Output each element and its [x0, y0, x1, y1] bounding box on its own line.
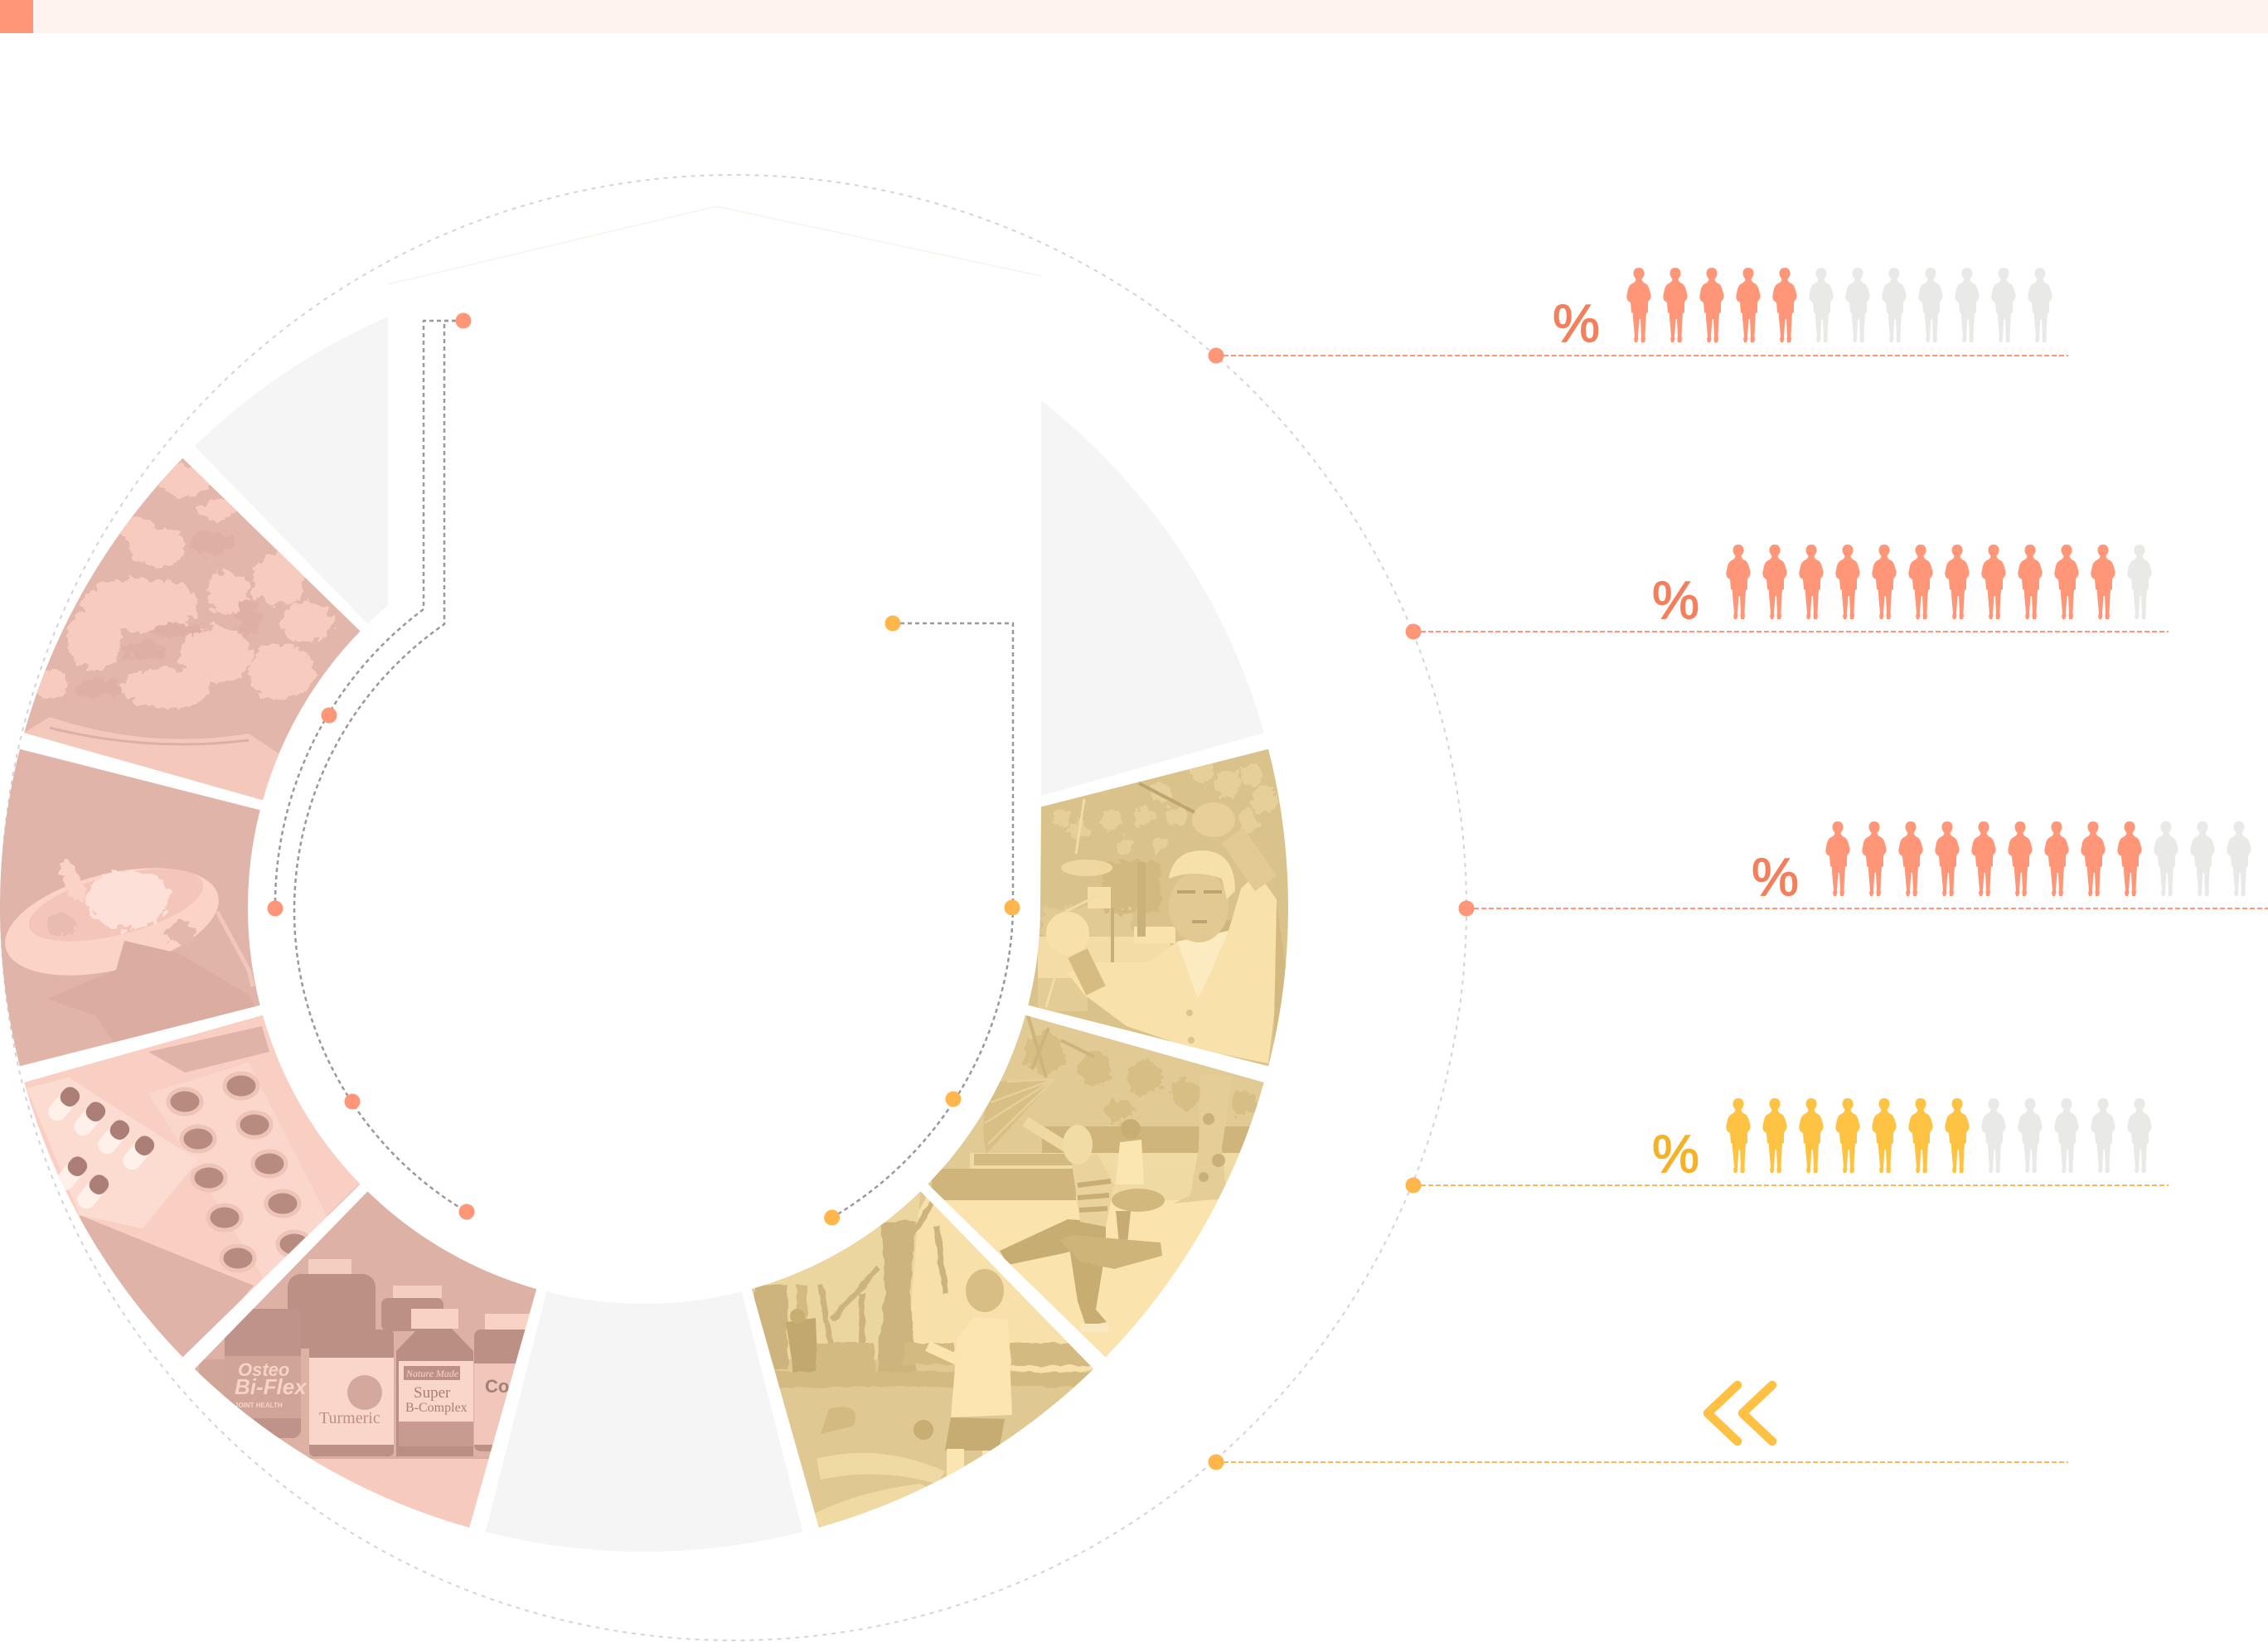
- left blister sheet: [27, 1078, 198, 1228]
- photo: bowl of rice: [12, 448, 369, 804]
- icon: double left chevron: [1708, 1385, 1772, 1441]
- percent sign 2: %: [1652, 570, 1699, 630]
- Osteo Bi-Flex bottle: Bi-Flex: [235, 1374, 308, 1399]
- plate edge: [24, 717, 286, 800]
- Nature Made bottle: [396, 1309, 473, 1456]
- raised arm: [1248, 873, 1265, 891]
- back bottle right: [381, 1298, 443, 1331]
- Nature Made bottle: Nature Made: [405, 1368, 459, 1379]
- CoQ bottle: CoQ: [485, 1376, 523, 1397]
- Turmeric bottle: [309, 1330, 394, 1456]
- hand: [47, 941, 259, 1046]
- leader dot 1: [1209, 348, 1224, 363]
- yellow connector line: [832, 623, 1013, 1218]
- bright background: [907, 1194, 1102, 1376]
- Osteo Bi-Flex bottle: JOINT HEALTH: [235, 1402, 283, 1409]
- inner yellow dots: [824, 615, 1020, 1225]
- dark surfaces: [80, 1215, 254, 1368]
- dashed outer ring: [1, 175, 1466, 1640]
- dancer's lower fan: [1100, 1238, 1162, 1269]
- left arm and fist: [1078, 953, 1096, 991]
- header bar: [0, 0, 2268, 33]
- panel: empty segment top left: [195, 317, 388, 624]
- shelf: [182, 1457, 547, 1532]
- people pictogram 2: 11 of 12: [1726, 545, 2152, 619]
- diabolo: [1061, 860, 1112, 876]
- Turmeric bottle: Turmeric: [319, 1409, 380, 1427]
- people pictogram 3: 9 of 12: [1825, 821, 2251, 896]
- plane tree trunk: [1174, 1088, 1225, 1204]
- CoQ bottle: [474, 1314, 532, 1451]
- leader dot 4: [1406, 1177, 1421, 1194]
- man's hair: [1169, 850, 1235, 899]
- percent sign 4: %: [1652, 1124, 1699, 1184]
- panel: empty segment bottom: [486, 1291, 802, 1552]
- leader dot 2: [1406, 623, 1421, 640]
- percent sign 1: %: [1553, 293, 1600, 353]
- photo: supplement bottles: [182, 1185, 547, 1533]
- leader line 2: [1413, 631, 2169, 632]
- leader line 4: [1413, 1184, 2169, 1186]
- stat row 5: [1209, 1385, 2068, 1470]
- trees: [754, 1202, 945, 1380]
- right blister sheet: [148, 1063, 331, 1280]
- Nature Made bottle: B-Complex: [405, 1401, 468, 1415]
- header accent block: [0, 0, 33, 33]
- path light ripples: [817, 1453, 945, 1484]
- salmon connector lines: [275, 321, 467, 1212]
- stat row 3: [1459, 821, 2268, 917]
- inner salmon dots: [267, 313, 474, 1220]
- man in background: [786, 1318, 817, 1373]
- photo: fan dancers in park: [928, 1015, 1264, 1358]
- ground: [945, 1200, 1218, 1358]
- man's face: [1174, 920, 1227, 942]
- back bottle: [288, 1274, 376, 1349]
- leader line 5: [1216, 1461, 2068, 1463]
- stat row 4: [1406, 1098, 2169, 1194]
- panel: empty segment top right: [1041, 400, 1264, 796]
- leader dot 5: [1209, 1454, 1224, 1470]
- photo: man playing diabolo: [1028, 749, 1288, 1066]
- park fence and hedge: [746, 1343, 1102, 1387]
- photo: blister packs of pills: [17, 1011, 373, 1368]
- faint centre panel outline: [388, 206, 1041, 284]
- stat row 1: [1209, 268, 2068, 363]
- bottle far left: [199, 1359, 228, 1434]
- Osteo Bi-Flex bottle: Osteo: [238, 1359, 289, 1380]
- leader line 3: [1466, 908, 2268, 909]
- background woman: [1116, 1211, 1131, 1240]
- food in bowl: [47, 862, 199, 944]
- Osteo Bi-Flex bottle: [225, 1309, 308, 1438]
- bowl: [0, 849, 230, 995]
- leader dot 3: [1459, 900, 1474, 917]
- upright fan: [983, 1081, 1046, 1154]
- man's cardigan: [1068, 873, 1279, 1063]
- people pictogram 4: 7 of 12: [1726, 1098, 2152, 1173]
- Nature Made bottle: Super: [414, 1384, 451, 1402]
- photo: woman practising in park: [751, 1192, 1094, 1528]
- photo: hand holding a bowl: [0, 738, 274, 1078]
- leader line 1: [1216, 355, 2068, 356]
- stat row 2: [1406, 545, 2169, 640]
- woman: [951, 1364, 1012, 1417]
- dancer: [1000, 1219, 1106, 1265]
- percent sign 3: %: [1752, 847, 1799, 907]
- people pictogram 1: 5 of 12: [1626, 268, 2052, 342]
